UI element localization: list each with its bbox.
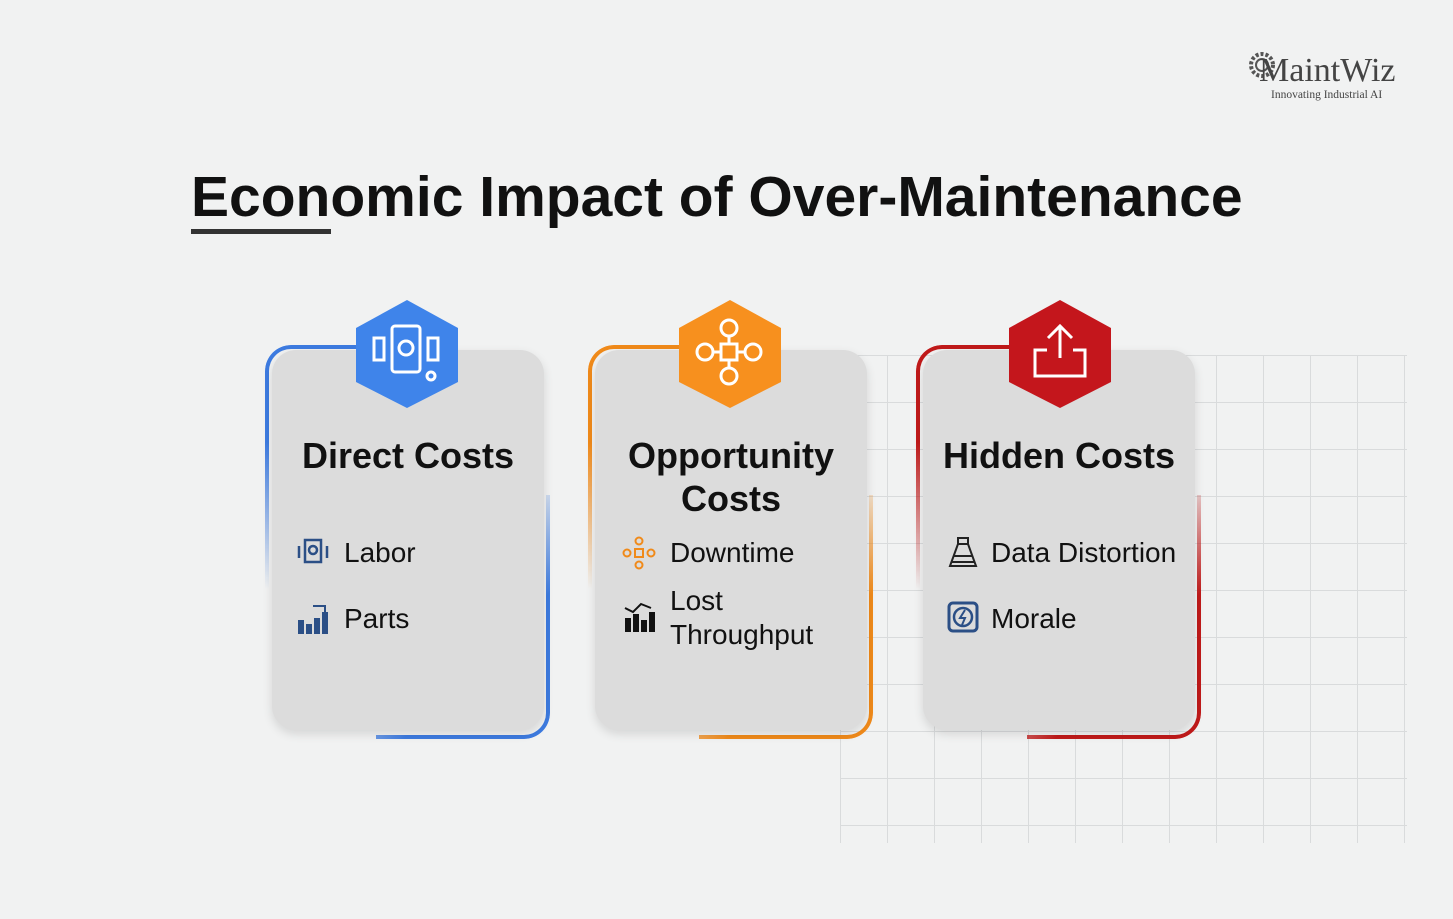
item: parts: Parts <box>344 603 409 634</box>
item: morale: Morale <box>991 603 1077 634</box>
heading: Hidden Costs <box>943 435 1175 476</box>
icon: orange hexagon <box>679 300 781 408</box>
heading: Opportunity <box>628 435 834 476</box>
title: Economic Impact of Over-Maintenance <box>191 165 1243 229</box>
title underline <box>191 229 331 234</box>
item: lost throughput: Throughput <box>670 619 813 650</box>
item: data distortion: Data Distortion <box>991 537 1176 568</box>
item: downtime <box>622 536 794 570</box>
heading: Costs <box>681 478 781 519</box>
background grid <box>840 355 1407 843</box>
item: morale <box>948 602 1077 634</box>
logo: MaintWiz <box>1259 52 1395 89</box>
heading: Direct Costs <box>302 435 514 476</box>
icon: red hexagon <box>1009 300 1111 408</box>
item: labor <box>298 537 416 568</box>
panel: opportunity costs <box>588 300 873 739</box>
item: downtime: Downtime <box>670 537 794 568</box>
item: lost throughput: Lost <box>670 585 723 616</box>
heading <box>628 435 834 519</box>
item: lost throughput <box>624 585 813 650</box>
item: parts <box>298 603 409 634</box>
item: labor: Labor <box>344 537 416 568</box>
icon: blue hexagon <box>356 300 458 408</box>
panel: hidden costs <box>916 300 1201 739</box>
panel: direct costs <box>265 300 550 739</box>
logo: Innovating Industrial AI <box>1271 89 1382 101</box>
